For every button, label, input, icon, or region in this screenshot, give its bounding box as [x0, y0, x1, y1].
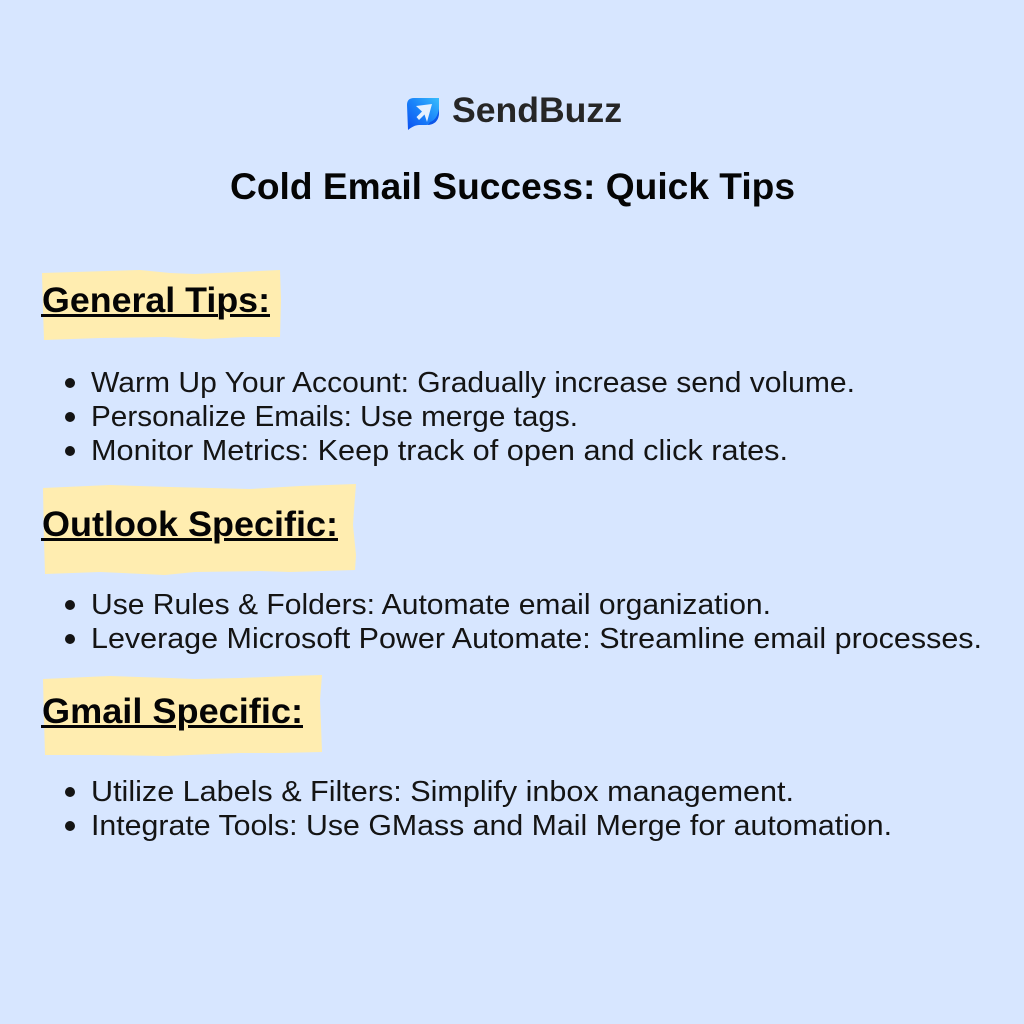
title: Cold Email Success: Quick Tips	[230, 166, 795, 207]
bullet list: outlook tips: Use Rules & Folders: Automate email organization.	[91, 589, 771, 621]
logo wordmark: SendBuzz	[452, 91, 622, 130]
bullet list: general tips: Warm Up Your Account: Gradually increase send volume.	[91, 367, 855, 399]
logo: SendBuzz	[407, 91, 622, 130]
bullet list: general tips: Personalize Emails: Use merge tags.	[91, 401, 578, 433]
section: Gmail Specific	[41, 675, 892, 842]
heading highlight	[43, 675, 322, 756]
heading: General Tips: General Tips:	[42, 281, 270, 320]
bullet list: outlook tips: Leverage Microsoft Power Automate: Streamline email processes.	[91, 623, 982, 655]
section: General Tips	[41, 270, 855, 467]
bullet list: outlook tips	[65, 589, 982, 655]
icon: send arrow bubble	[407, 98, 439, 130]
section: Outlook Specific	[41, 484, 982, 655]
bullet list: general tips: Monitor Metrics: Keep track of open and click rates.	[91, 435, 788, 467]
bullet list: gmail tips	[65, 776, 892, 842]
heading highlight	[42, 270, 281, 340]
heading: Outlook Specific: Outlook Specific:	[42, 505, 338, 544]
bullet list: general tips	[65, 367, 855, 467]
bullet list: gmail tips: Integrate Tools: Use GMass and Mail Merge for automation.	[91, 810, 892, 842]
heading highlight	[43, 484, 356, 575]
heading: Gmail Specific: Gmail Specific:	[42, 692, 303, 731]
bullet list: gmail tips: Utilize Labels & Filters: Simplify inbox management.	[91, 776, 794, 808]
